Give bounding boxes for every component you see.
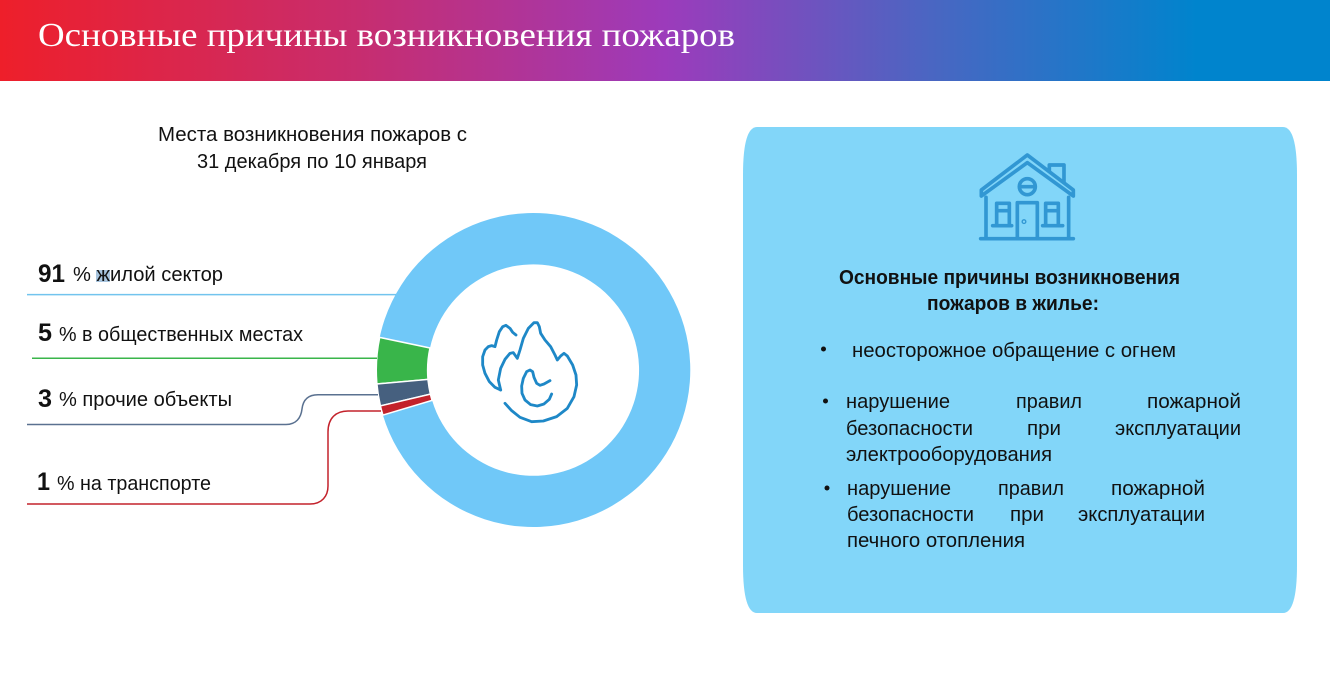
bullet: electrical equipment: нарушение [846, 391, 950, 413]
legend: public places 5%: % в общественных местах [59, 324, 303, 346]
legend: public places 5% [32, 319, 377, 358]
bullet: stove heating: эксплуатации [1078, 504, 1205, 526]
legend: residential 91%: % жилой сектор [73, 264, 223, 286]
chart heading [158, 124, 467, 173]
bullet: stove heating: правил [998, 478, 1064, 500]
legend: public places 5%: 5 [38, 319, 52, 347]
legend: transport 1%: 1 [37, 468, 50, 496]
header banner [0, 0, 1330, 81]
title: Основные причины возникновения пожаров [38, 17, 735, 54]
legend: other objects 3%: 3 [38, 385, 52, 413]
bullet: stove heating: безопасности [847, 504, 974, 526]
legend: residential 91% [27, 260, 396, 295]
bullet: electrical equipment: при [1027, 418, 1061, 440]
bullet: electrical equipment: пожарной [1147, 391, 1241, 413]
bullet: electrical equipment: безопасности [846, 418, 973, 440]
legend: residential 91%: 91 [38, 260, 65, 288]
chart heading: Места возникновения пожаров с [158, 124, 467, 146]
bullet: stove heating: пожарной [1111, 478, 1205, 500]
panel heading: Основные причины возникновения [839, 267, 1180, 289]
bullet: electrical equipment: правил [1016, 391, 1082, 413]
bullet: electrical equipment [823, 391, 1241, 466]
bullet: stove heating [824, 478, 1205, 552]
donut chart [376, 213, 690, 527]
bullet: stove heating: печного отопления [847, 530, 1025, 552]
legend: transport 1%: % на транспорте [57, 473, 211, 495]
bullet: stove heating: нарушение [847, 478, 951, 500]
chart heading: 31 декабря по 10 января [197, 151, 427, 173]
icon: house [981, 155, 1073, 239]
highlight mark on letter [96, 270, 110, 282]
bullet: careless handling of fire: неосторожное обращение с огнем [852, 340, 1176, 362]
slice: other objects 3% [377, 379, 430, 406]
bullet: electrical equipment: эксплуатации [1115, 418, 1241, 440]
bullet: electrical equipment: электрооборудования [846, 444, 1052, 466]
legend: transport 1% [27, 411, 381, 504]
icon: flames [483, 323, 577, 422]
panel heading [839, 267, 1180, 315]
panel heading: пожаров в жилье: [927, 293, 1099, 315]
panel: causes in housing [743, 127, 1297, 613]
bullet: stove heating: при [1010, 504, 1044, 526]
legend: other objects 3%: % прочие объекты [59, 389, 232, 411]
slice: residential 91% [380, 213, 690, 527]
slice: public places 5% [376, 337, 430, 384]
legend: other objects 3% [27, 385, 378, 424]
slice: transport 1% [380, 394, 432, 415]
